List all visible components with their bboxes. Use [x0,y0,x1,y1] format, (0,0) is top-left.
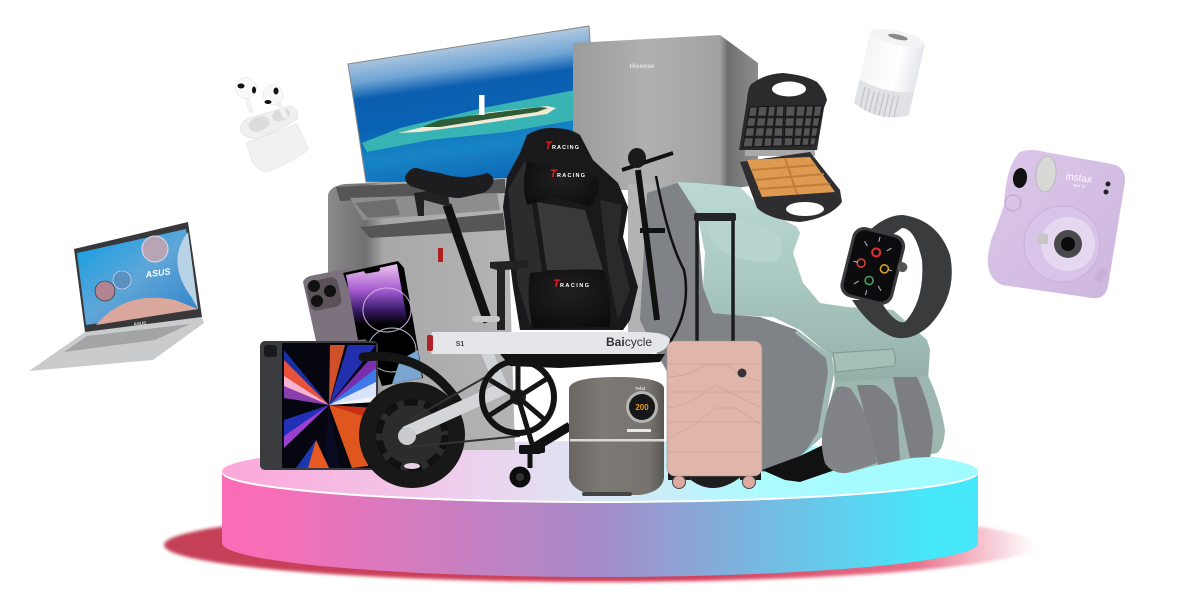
chair logos [545,140,589,290]
left earbud [236,78,256,111]
chair logos: RACING [552,145,579,151]
smartwatch [838,215,952,338]
chainring [482,361,554,453]
chair legrest [822,376,945,473]
laptop bezel brand: ASUS [133,320,146,327]
fridge brand: Hisense [630,63,655,70]
phone back [303,268,368,370]
frame down tube [486,350,505,395]
laptop wallpaper [95,232,198,325]
purifier grille [852,79,914,122]
phone camera bump [305,276,343,312]
instant camera: mini 11 [1073,182,1087,189]
fryer dial [626,391,658,423]
podium [222,441,978,577]
earbuds [236,78,308,171]
air fryer [569,377,664,496]
frame top tube [430,332,670,354]
television [348,26,600,186]
watch case [838,225,914,309]
waffle maker [739,73,842,222]
lumbar pillow [529,269,610,328]
chain [408,370,520,447]
instant camera [988,150,1125,298]
massage chair [640,182,945,482]
bicycle rear wheel and drivetrain [359,356,554,488]
headrest pillow [707,220,782,262]
refrigerator [573,35,758,190]
fryer handle strip [570,439,664,442]
phone front [343,261,423,386]
waffle grid [743,106,822,147]
laptop [29,222,204,371]
air purifier [852,25,927,122]
camera viewfinder [1012,167,1028,189]
chair armrest [490,260,528,330]
frame label S1: S1 [456,341,464,348]
laptop lid [74,222,202,332]
earbuds case [246,124,308,171]
tablet wallpaper rays [284,345,376,468]
chair logos: T [550,168,558,180]
tablet [260,341,378,470]
chair sage upholstery [677,182,930,386]
suitcase shell [667,341,762,476]
frame label Baicycle: Baicycle [606,335,652,349]
chair grey back [640,183,834,472]
washing machine [328,178,662,450]
bicycle [405,148,686,395]
right earbud [263,85,285,116]
laptop base [29,317,204,371]
bike saddle [405,168,493,198]
chair logos: T [545,140,553,152]
laptop brand: ASUS [144,266,171,280]
camera brand: instax [1065,171,1093,186]
side panel trim [795,330,834,452]
suitcase badge [738,368,746,378]
waffle base [740,152,842,222]
suitcase wheels [668,467,761,488]
rear tyre [359,382,465,488]
handlebar [622,148,686,345]
chair logos: RACING [560,283,589,289]
suitcase [667,213,762,488]
chair logos: T [553,278,561,290]
phone [303,261,423,386]
chair base and caster [500,354,665,488]
seat post [447,205,488,322]
earbuds lid [240,106,298,138]
waffle [747,157,835,197]
suitcase handle [697,215,733,345]
chair logos: RACING [557,173,585,179]
waffle lid [739,73,827,150]
seat cushion [833,349,895,372]
gaming chair [490,128,665,488]
head pillow [524,162,599,207]
fryer brand: Tefal [635,386,645,391]
laptop screen [77,229,198,325]
fryer display: 200 [635,403,649,412]
chair back [503,128,638,330]
chainstay [405,390,500,433]
chair base [762,445,835,482]
watch band [852,215,952,338]
camera lens [1024,206,1100,282]
fender [363,356,460,405]
podium shadow [164,508,1036,582]
camera flash [1034,155,1058,193]
